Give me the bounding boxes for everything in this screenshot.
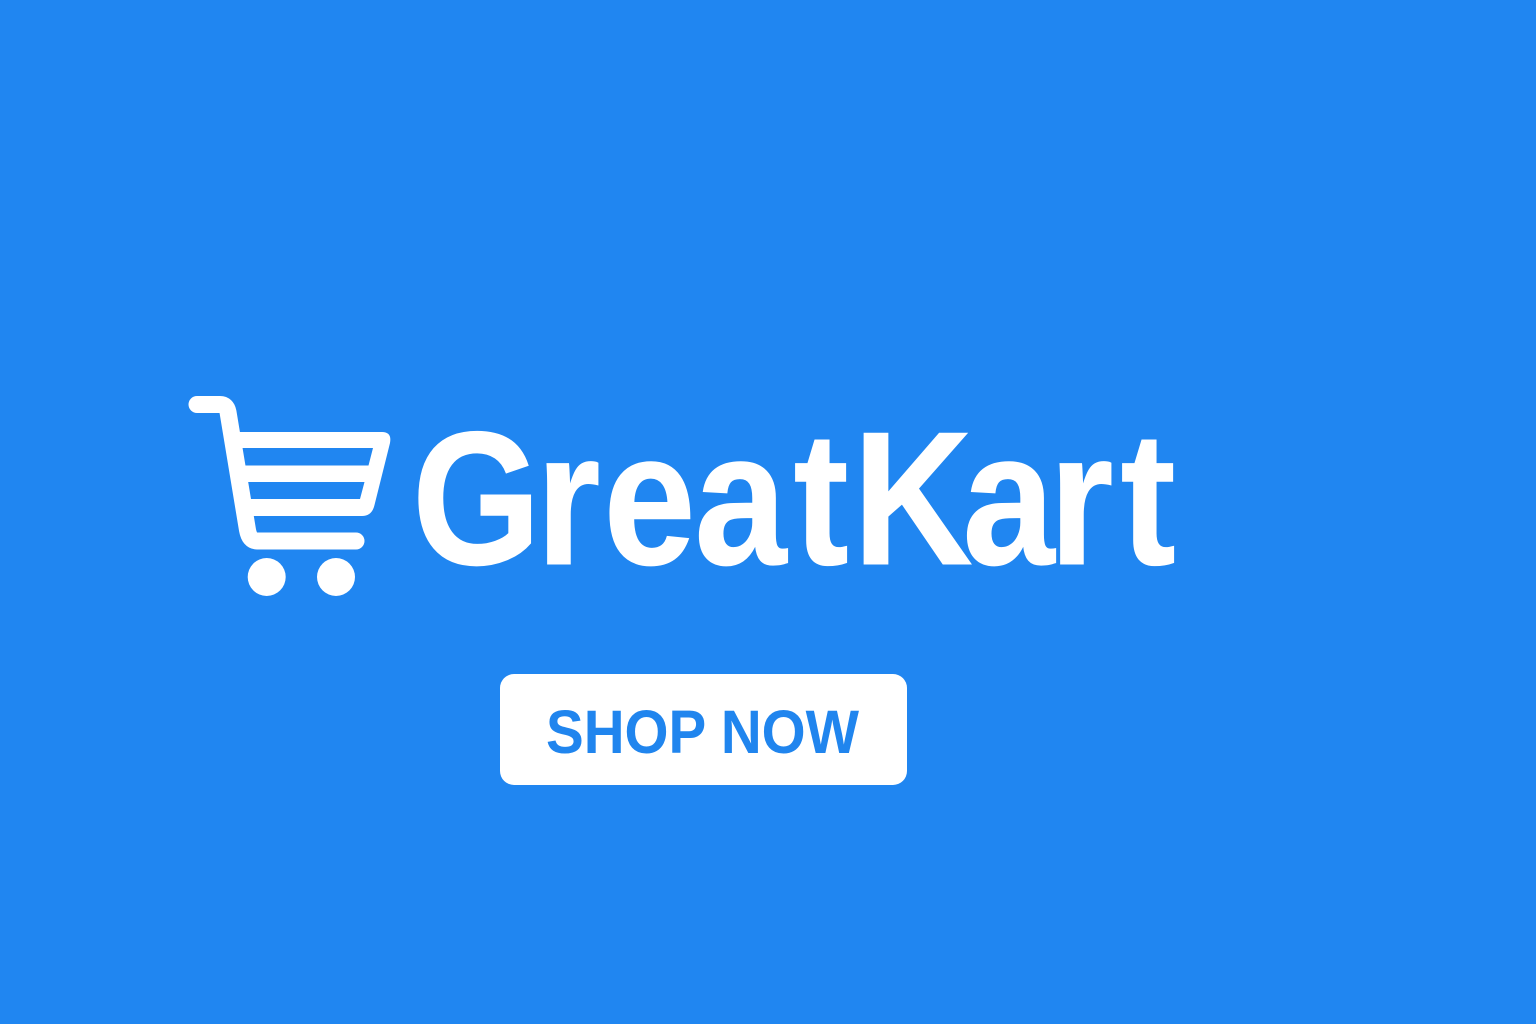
cart wheel left (248, 558, 286, 596)
cart basket (235, 432, 390, 516)
brand name: GreatKart (412, 392, 1176, 605)
button background (500, 674, 907, 785)
button label: SHOP NOW (546, 698, 859, 766)
button: shop now (500, 674, 907, 785)
icon: shopping cart (197, 404, 390, 596)
cart handle and frame (197, 404, 356, 541)
cart wheel right (317, 558, 355, 596)
